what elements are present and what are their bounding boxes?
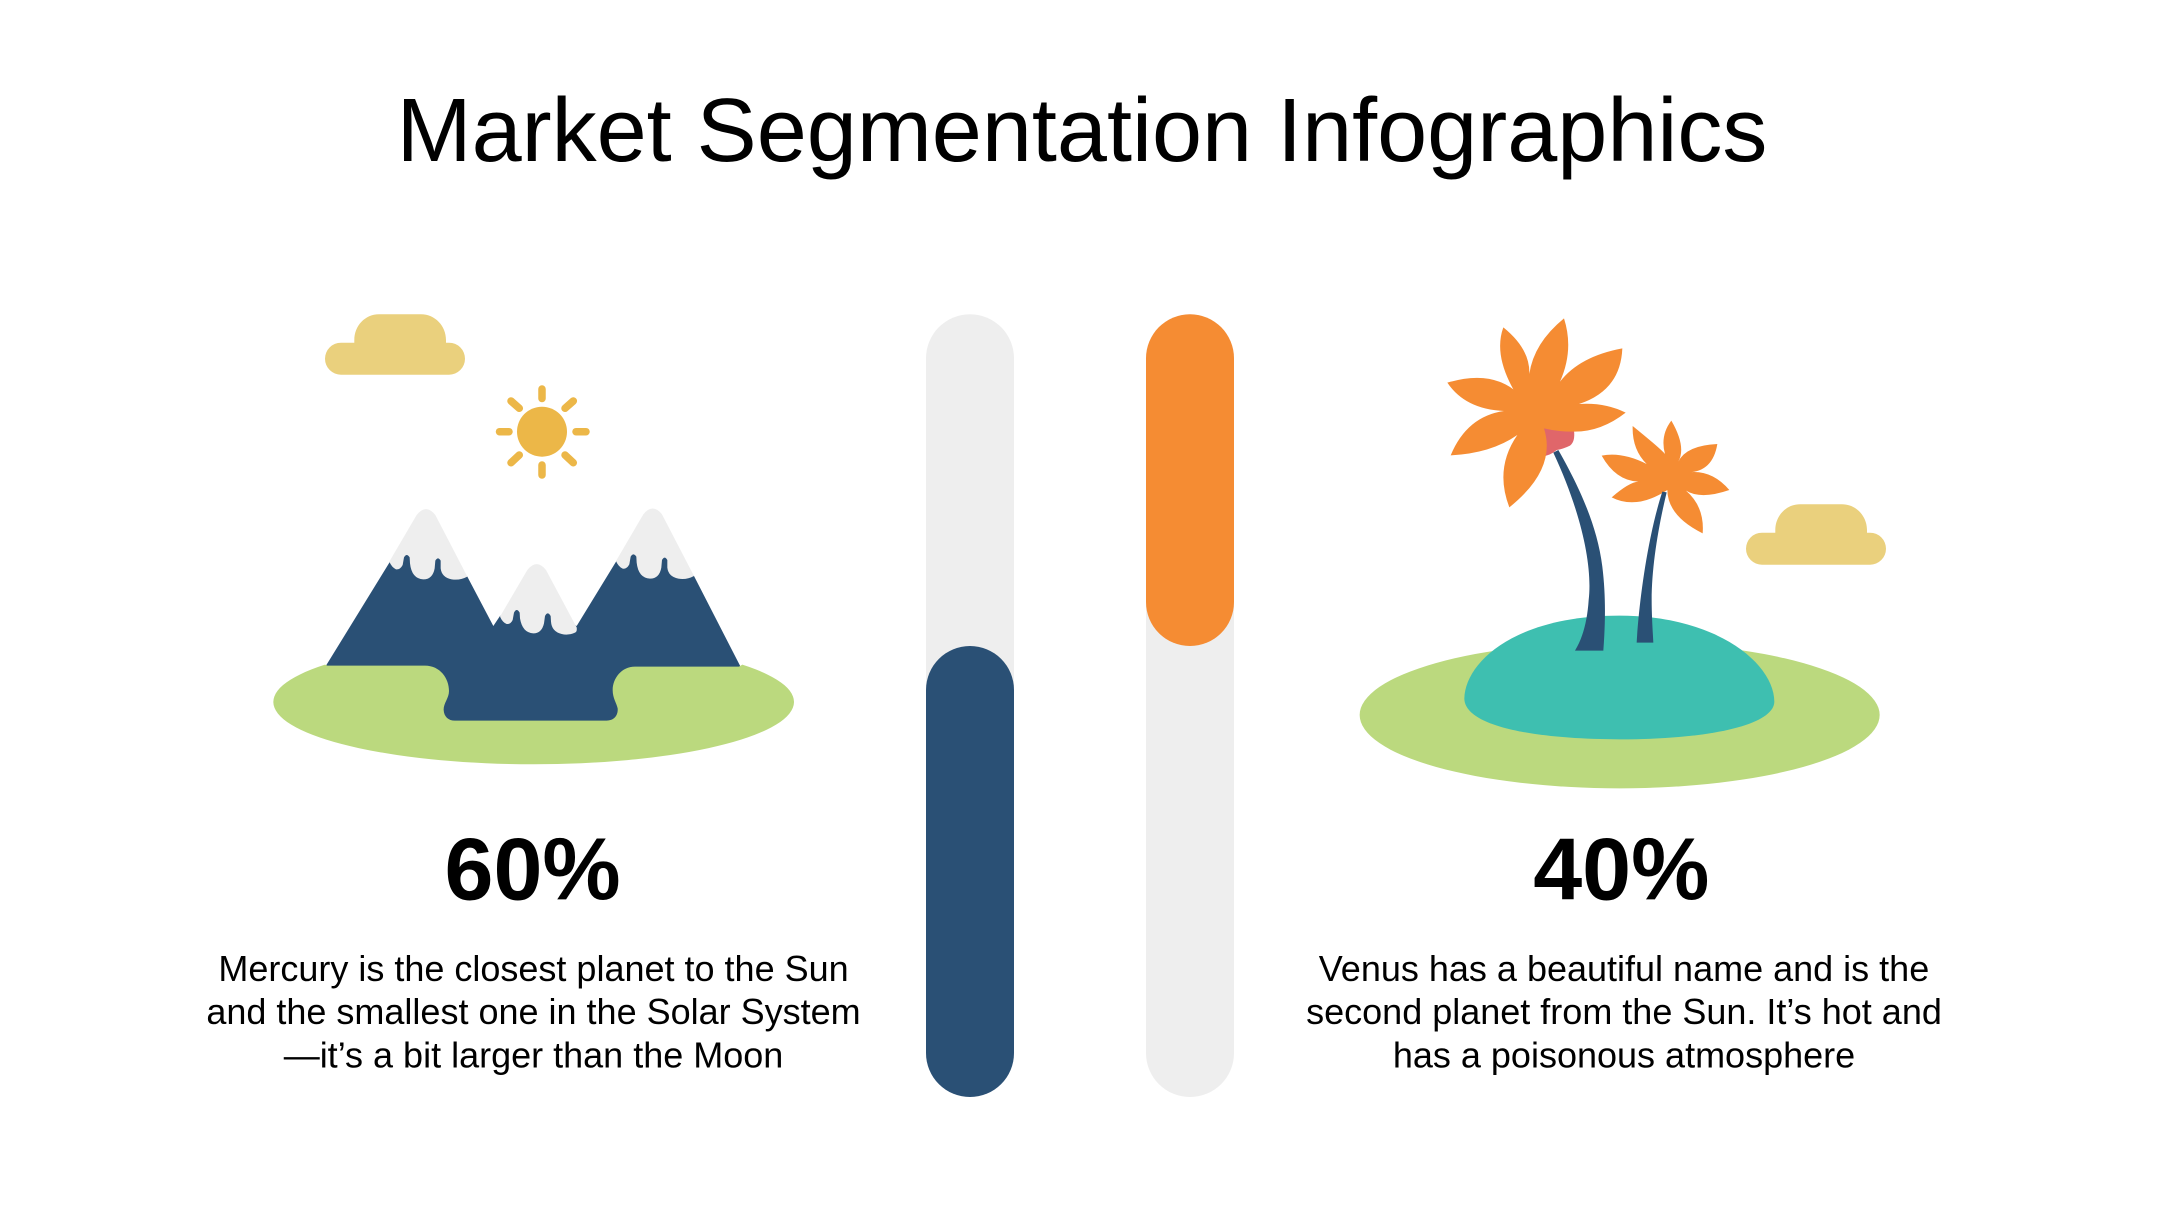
- mountain range: [326, 550, 740, 723]
- description: venus: second planet from the Sun. It’s hot and: [1306, 991, 1942, 1032]
- left peak snow: [389, 509, 467, 580]
- palm trunks: [1553, 450, 1667, 651]
- description: mercury: Mercury is the closest planet to the Sun: [218, 948, 849, 989]
- icon: cloud: [1746, 504, 1886, 565]
- small palm trunk: [1637, 492, 1667, 643]
- centre peak snow: [500, 564, 577, 635]
- bar: 60% progress: [926, 314, 1014, 1097]
- island base: [1360, 616, 1880, 788]
- green ground with lake: [273, 665, 794, 764]
- icon: sun: [500, 389, 586, 475]
- title: Market Segmentation Infographics: [397, 81, 1767, 181]
- illustration: mountains: [273, 314, 794, 764]
- right peak snow: [616, 508, 694, 579]
- teal hill: [1464, 616, 1774, 739]
- small palm leaves: [1602, 421, 1729, 533]
- mountain landscape: [273, 508, 794, 764]
- description: mercury: —it’s a bit larger than the Moon: [284, 1034, 783, 1075]
- icon: cloud: [325, 314, 465, 375]
- value: 40%: 40%: [1533, 820, 1709, 918]
- green ground: [1360, 642, 1880, 788]
- description: venus: Venus has a beautiful name and is the: [1319, 948, 1929, 989]
- coconuts: [1541, 427, 1574, 457]
- panel: mercury segment: [206, 314, 861, 1075]
- bar: 40% progress: [1146, 314, 1234, 1097]
- panel: venus segment: [1306, 318, 1942, 1075]
- illustration: palm island: [1360, 318, 1886, 788]
- large palm trunk: [1553, 450, 1605, 651]
- description: venus: has a poisonous atmosphere: [1393, 1034, 1855, 1075]
- large palm leaves: [1447, 318, 1626, 507]
- description: mercury: and the smallest one in the Solar System: [206, 991, 861, 1032]
- palm crowns: [1447, 318, 1729, 533]
- value: 60%: 60%: [445, 820, 621, 918]
